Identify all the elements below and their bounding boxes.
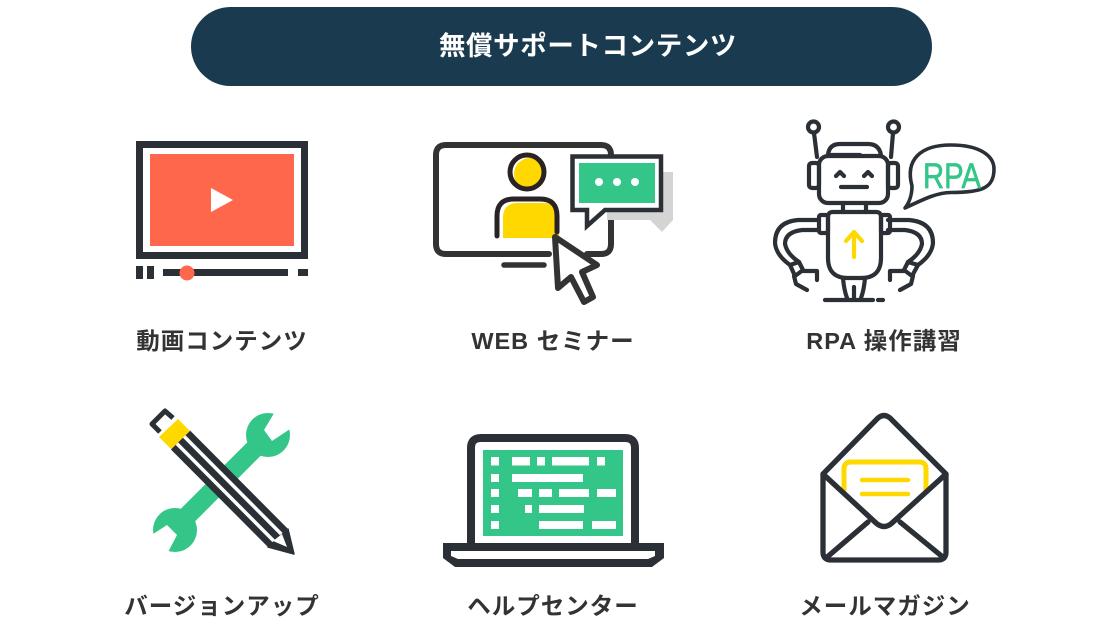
label: help center: ヘルプセンター [467,593,639,619]
icon: robot: RPA [923,157,982,196]
icon: envelope [823,416,946,560]
label: web seminar: WEB セミナー [471,328,635,354]
label: version up: バージョンアップ [124,593,320,619]
icon: web seminar [436,145,673,302]
title banner [191,7,932,86]
label: RPA training: RPA 操作講習 [806,328,962,354]
label: video content: 動画コンテンツ [136,328,308,354]
icon: robot [775,122,994,300]
icon: wrench and pencil [150,410,296,556]
title banner: 無償サポートコンテンツ [439,31,737,61]
label: mail magazine: メールマガジン [799,593,971,619]
icon: video player [136,144,308,280]
icon: laptop [443,438,664,567]
laptop screen rows [491,457,616,529]
